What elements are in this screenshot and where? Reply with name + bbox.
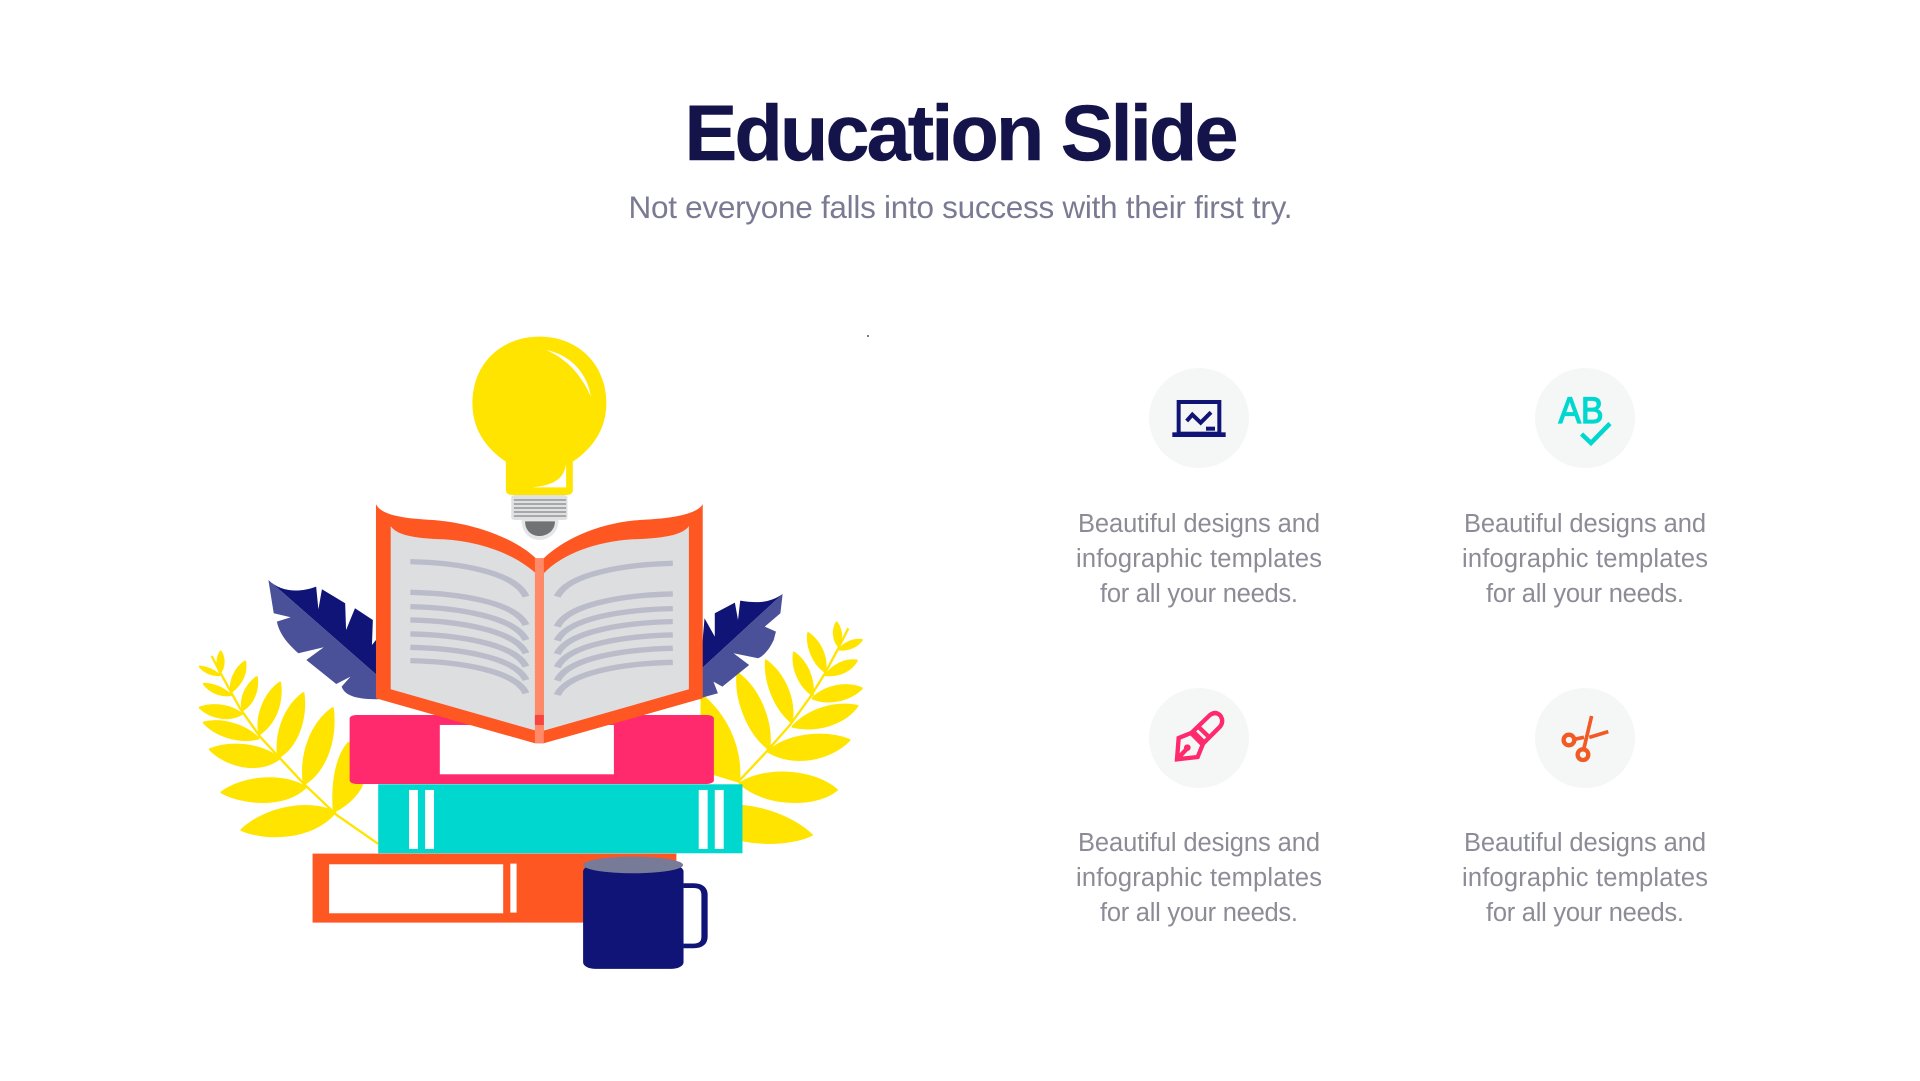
- open book: [376, 504, 703, 743]
- description 3: Beautiful designs and: [1078, 829, 1320, 857]
- icon: AB check: AB: [1558, 390, 1604, 431]
- icon: AB check: [1535, 368, 1635, 468]
- subtitle: Not everyone falls into success with their first try.: [628, 189, 1292, 225]
- description 3: for all your needs.: [1100, 899, 1298, 927]
- panel: feature 3: [1076, 688, 1322, 927]
- icon: scissors: [1535, 688, 1635, 788]
- description 1: Beautiful designs and: [1078, 510, 1320, 538]
- description 4: Beautiful designs and: [1464, 829, 1706, 857]
- description 2: [1462, 510, 1708, 608]
- teal book: [378, 784, 742, 853]
- description 3: [1076, 829, 1322, 927]
- description 1: [1076, 510, 1322, 608]
- left feather: [268, 580, 379, 699]
- description 2: for all your needs.: [1486, 580, 1684, 608]
- panel: feature 4: [1462, 688, 1708, 927]
- description 4: [1462, 829, 1708, 927]
- icon: chalkboard: [1149, 368, 1249, 468]
- title: Education Slide: [684, 88, 1238, 177]
- coffee mug: [583, 857, 705, 969]
- stray dot: [867, 335, 869, 337]
- icon: fountain pen: [1149, 688, 1249, 788]
- yellow leaves: right branch: [702, 623, 862, 843]
- page text lines: [410, 562, 673, 695]
- description 1: infographic templates: [1076, 545, 1322, 573]
- illustration: books, bulb and feathers: [268, 337, 783, 923]
- pink book: [350, 715, 714, 784]
- right feather: [700, 594, 783, 698]
- panel: feature 1: [1076, 368, 1322, 608]
- description 4: infographic templates: [1462, 864, 1708, 892]
- orange book: [313, 854, 676, 923]
- description 2: infographic templates: [1462, 545, 1708, 573]
- description 1: for all your needs.: [1100, 580, 1298, 608]
- yellow leaves: left branch: [200, 652, 378, 844]
- panel: feature 2: [1462, 368, 1708, 608]
- description 2: Beautiful designs and: [1464, 510, 1706, 538]
- description 4: for all your needs.: [1486, 899, 1684, 927]
- light bulb: [472, 337, 606, 540]
- stacked books: [313, 715, 742, 923]
- description 3: infographic templates: [1076, 864, 1322, 892]
